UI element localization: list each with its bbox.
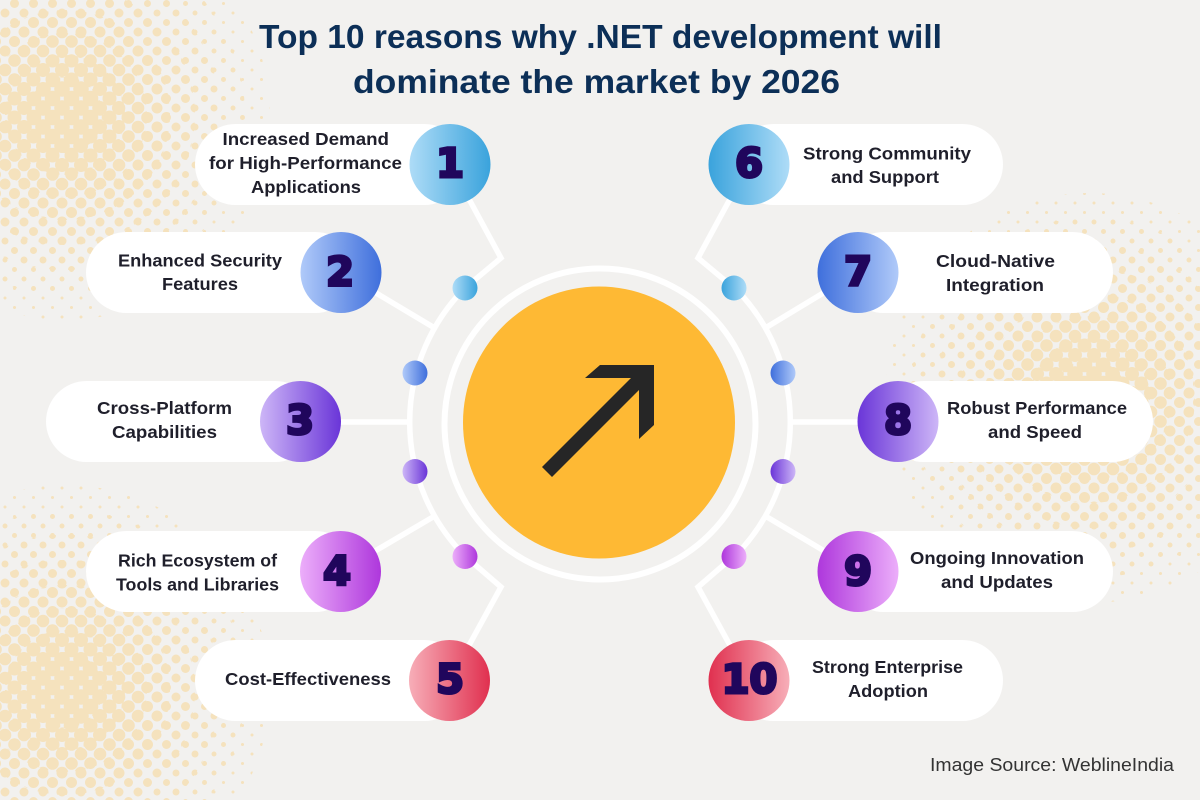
- reason 1: for High-Performance: [209, 153, 402, 173]
- reason 9: [818, 531, 1113, 612]
- reason 2: [86, 232, 382, 313]
- reason 6: 6: [735, 141, 763, 187]
- reason 10: Adoption: [848, 681, 928, 701]
- reason 6: [708, 124, 1003, 205]
- reason 10: Strong Enterprise: [812, 657, 963, 677]
- halftone pattern: bottom left: [0, 485, 270, 800]
- title: dominate the market by 2026: [353, 63, 840, 100]
- reason 4: Rich Ecosystem of: [118, 550, 277, 570]
- image source credit: Image Source: WeblineIndia: [930, 755, 1175, 775]
- reason 1: [195, 124, 490, 205]
- reason 3: [46, 381, 341, 462]
- reason 1: Increased Demand: [222, 129, 389, 149]
- reason 3: 3: [286, 398, 314, 444]
- title: Top 10 reasons why .NET development will: [259, 18, 942, 55]
- reason 4: [86, 531, 381, 612]
- reason 8: 8: [884, 398, 912, 444]
- reason 9: and Updates: [941, 572, 1053, 592]
- halftone pattern: top left: [0, 0, 270, 320]
- reason 10: [708, 640, 1003, 721]
- center ring: [444, 268, 756, 580]
- reason 1: Applications: [251, 177, 361, 197]
- reason 10: 10: [722, 657, 777, 703]
- reason 5: Cost-Effectiveness: [225, 669, 391, 689]
- title: [259, 18, 942, 100]
- reason 8: and Speed: [988, 422, 1082, 442]
- reason 3: Capabilities: [112, 422, 217, 442]
- reason 4: Tools and Libraries: [116, 574, 279, 594]
- reason 6: Strong Community: [803, 144, 971, 164]
- reason 1: 1: [436, 141, 464, 187]
- node dots: [402, 276, 796, 569]
- reason 5: [195, 640, 490, 721]
- reason 7: Integration: [946, 275, 1044, 295]
- icon: up-right arrow: [542, 365, 654, 477]
- reason 7: [818, 232, 1113, 313]
- reason 7: 7: [844, 249, 872, 295]
- connector network: [300, 164, 898, 680]
- reason 9: 9: [844, 549, 872, 595]
- reason 9: Ongoing Innovation: [910, 548, 1084, 568]
- reason 6: and Support: [831, 167, 939, 187]
- reason 3: Cross-Platform: [97, 398, 232, 418]
- reason 5: 5: [436, 657, 464, 703]
- halftone pattern: right: [885, 193, 1200, 603]
- reason 4: 4: [323, 549, 351, 595]
- reason 7: Cloud-Native: [936, 251, 1055, 271]
- reason 2: 2: [326, 250, 354, 296]
- reason 8: Robust Performance: [947, 398, 1127, 418]
- reason 2: Features: [162, 274, 238, 294]
- reason 8: [858, 381, 1153, 462]
- reason 2: Enhanced Security: [118, 250, 282, 270]
- center circle with arrow: [463, 286, 735, 558]
